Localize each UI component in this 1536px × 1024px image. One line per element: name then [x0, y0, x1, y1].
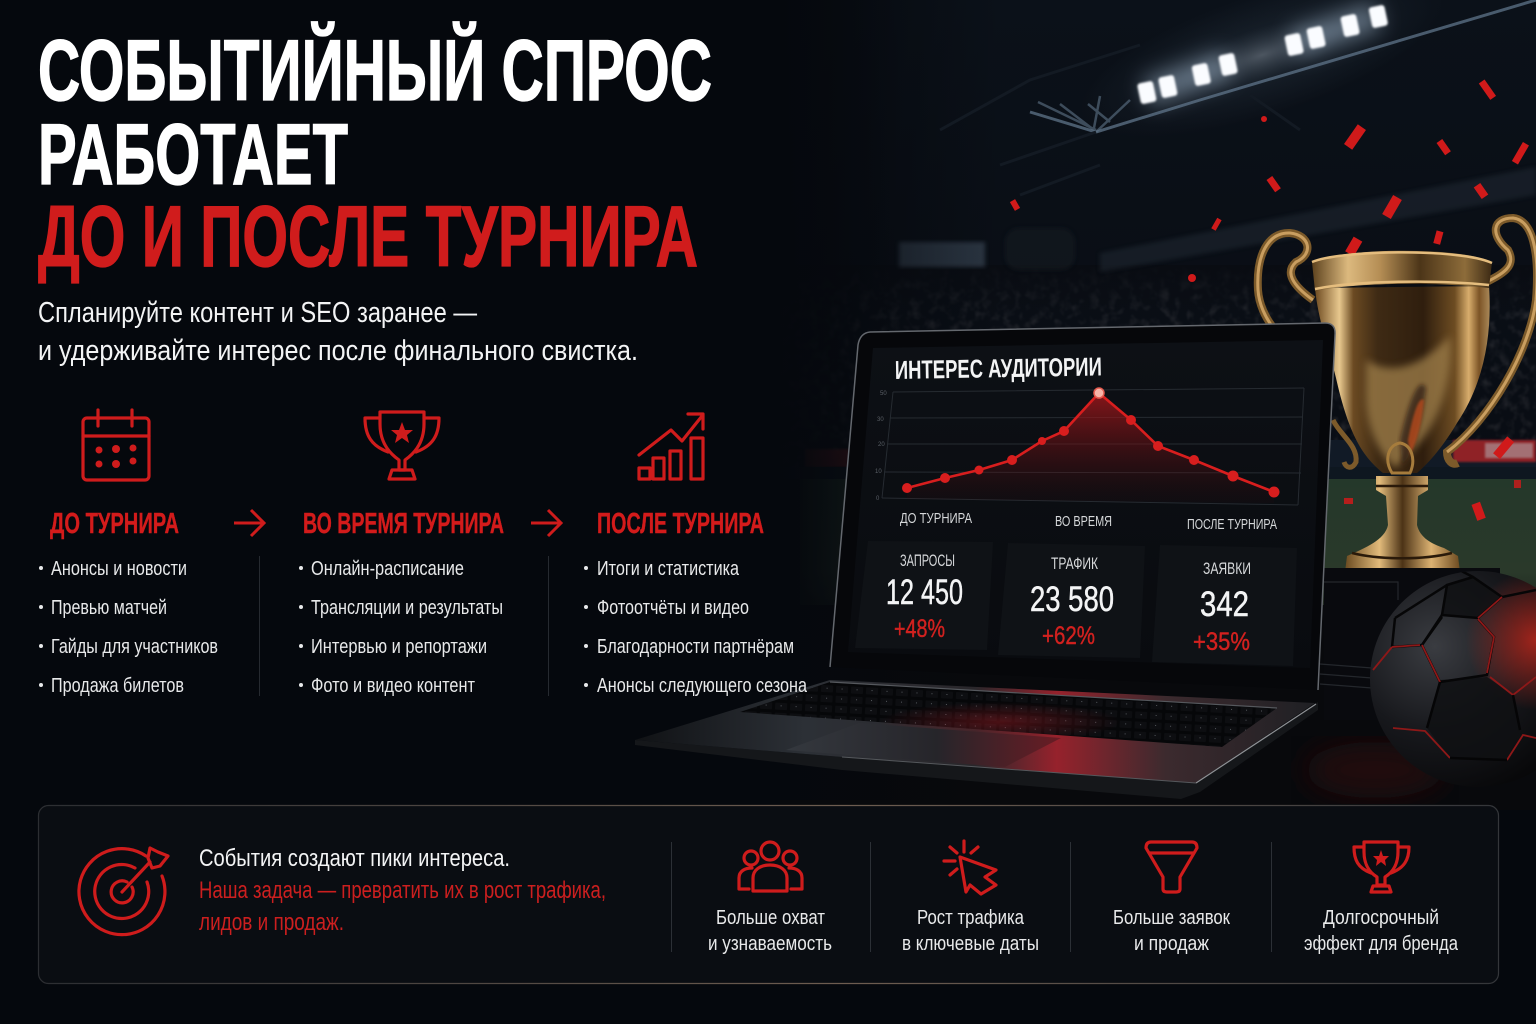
laptop base: [635, 680, 1318, 799]
arrow: [531, 510, 561, 536]
list: во время турнира: Трансляции и результаты: [311, 597, 503, 619]
subtitle: [38, 297, 638, 367]
subtitle: Спланируйте контент и SEO заранее —: [38, 297, 477, 329]
icon: growth chart: [639, 414, 703, 479]
icon: people: [739, 842, 802, 891]
benefit: заявки: и продаж: [1134, 933, 1210, 955]
list: после турнира: [584, 558, 808, 697]
panel message: лидов и продаж.: [199, 909, 344, 936]
title: [38, 22, 712, 285]
benefit: охват: Больше охват: [716, 907, 825, 929]
benefit: заявки: [1113, 907, 1230, 955]
metric card: трафик: ТРАФИК: [1051, 554, 1098, 573]
arrow: [234, 510, 264, 536]
list: во время турнира: [299, 558, 503, 697]
list: до турнира: Превью матчей: [51, 597, 167, 619]
dashboard panel: [848, 340, 1323, 668]
list: после турнира: Фотоотчёты и видео: [597, 597, 749, 619]
line chart: 20: [878, 442, 885, 448]
chart axis labels: ВО ВРЕМЯ: [1055, 513, 1112, 530]
metric card: трафик: [998, 543, 1145, 658]
metric card: заявки: ЗАЯВКИ: [1203, 559, 1251, 578]
icon: target: [79, 848, 168, 935]
panel message: Наша задача — превратить их в рост трафика,: [199, 877, 606, 904]
trophy: [1258, 218, 1536, 576]
list: во время турнира: Интервью и репортажи: [311, 636, 487, 658]
icon: long-term trophy: [1354, 842, 1409, 892]
metric card: заявки: [1152, 545, 1297, 666]
benefit: охват: [708, 907, 832, 955]
stage heading: во время турнира: ВО ВРЕМЯ ТУРНИРА: [303, 508, 504, 540]
list: после турнира: Анонсы следующего сезона: [597, 675, 808, 697]
icon: funnel: [1146, 842, 1197, 892]
subtitle: и удерживайте интерес после финального свистка.: [38, 335, 638, 367]
list: до турнира: [39, 558, 218, 697]
list: до турнира: Анонсы и новости: [51, 558, 187, 580]
title: РАБОТАЕТ: [38, 107, 348, 203]
metric card: запросы: ЗАПРОСЫ: [900, 551, 955, 570]
title: СОБЫТИЙНЫЙ СПРОС: [38, 22, 712, 119]
line chart: [875, 388, 1304, 505]
football: [903, 560, 1536, 863]
dashboard title: ИНТЕРЕС АУДИТОРИИ: [895, 351, 1102, 385]
benefit: трафик: в ключевые даты: [902, 933, 1039, 955]
metric card: заявки: 342: [1200, 585, 1249, 624]
icon: calendar: [83, 410, 149, 480]
list: во время турнира: Фото и видео контент: [311, 675, 475, 697]
line chart: 30: [877, 417, 884, 423]
line chart: 0: [876, 496, 880, 502]
metric card: запросы: 12 450: [886, 573, 963, 612]
stage heading: до турнира: ДО ТУРНИРА: [50, 508, 179, 540]
benefit: бренд: эффект для бренда: [1304, 933, 1459, 955]
metric card: запросы: [855, 541, 993, 650]
panel message: [199, 845, 606, 936]
trophy stem and base: [1345, 476, 1460, 576]
metric card: трафик: +62%: [1042, 622, 1095, 650]
confetti: [1010, 80, 1529, 521]
trophy handles: [1258, 218, 1536, 467]
icon: cursor click: [944, 841, 996, 894]
laptop: [635, 323, 1335, 799]
trophy bowl: [1315, 286, 1490, 473]
stage heading: после турнира: ПОСЛЕ ТУРНИРА: [597, 508, 764, 540]
benefit: трафик: [902, 907, 1039, 955]
trophy rim: [1312, 251, 1492, 291]
stadium floodlights and truss: [940, 0, 1536, 195]
benefit: бренд: [1304, 907, 1459, 955]
chart axis labels: ДО ТУРНИРА: [900, 510, 972, 527]
line chart: 50: [880, 391, 887, 397]
benefit: бренд: Долгосрочный: [1323, 907, 1439, 929]
metric card: трафик: 23 580: [1030, 580, 1114, 619]
benefit: трафик: Рост трафика: [917, 907, 1025, 929]
laptop screen bezel: [830, 323, 1335, 690]
list: до турнира: Продажа билетов: [51, 675, 184, 697]
metric card: заявки: +35%: [1193, 628, 1250, 656]
bottom panel: [38, 806, 1498, 984]
chart axis labels: ПОСЛЕ ТУРНИРА: [1187, 516, 1277, 533]
list: после турнира: Благодарности партнёрам: [597, 636, 794, 658]
benefit: охват: и узнаваемость: [708, 933, 832, 955]
list: во время турнира: Онлайн-расписание: [311, 558, 464, 580]
panel message: События создают пики интереса.: [199, 845, 510, 872]
list: до турнира: Гайды для участников: [51, 636, 218, 658]
list: после турнира: Итоги и статистика: [597, 558, 740, 580]
trophy plinth: [1320, 568, 1500, 720]
chart axis labels: [900, 510, 1277, 533]
line chart: 10: [875, 469, 882, 475]
stadium background photo: [760, 0, 1536, 810]
metric card: запросы: +48%: [894, 615, 945, 643]
title: ДО И ПОСЛЕ ТУРНИРА: [38, 189, 698, 285]
icon: trophy: [365, 412, 439, 479]
benefit: заявки: Больше заявок: [1113, 907, 1230, 929]
